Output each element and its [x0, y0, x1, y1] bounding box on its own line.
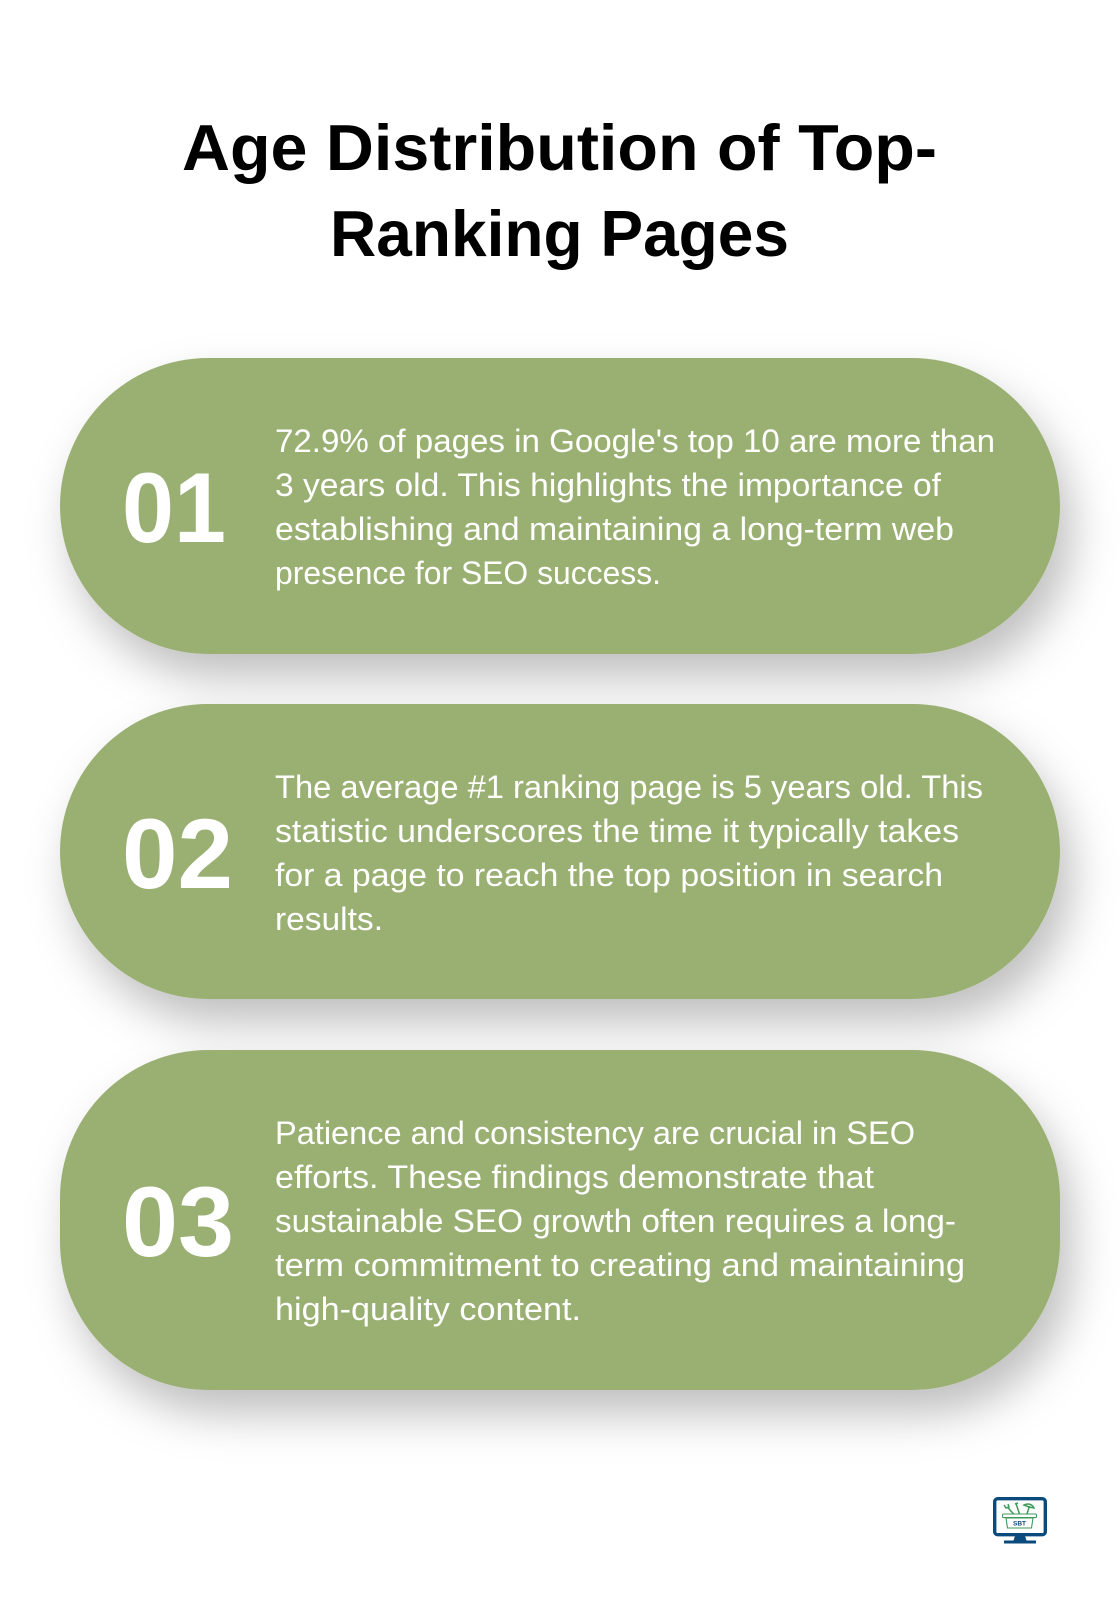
text block 03 — [275, 1115, 965, 1327]
text block 03: high-quality content. — [275, 1291, 581, 1327]
text block 03: sustainable SEO growth often requires a long- — [275, 1203, 956, 1239]
title: Age Distribution of Top- — [182, 111, 937, 184]
text block 02: statistic underscores the time it typically takes — [275, 813, 959, 849]
number 01: 01 — [122, 452, 226, 563]
text block 01: establishing and maintaining a long-term web — [275, 511, 954, 547]
text block 01: 72.9% of pages in Google's top 10 are more than — [275, 423, 995, 459]
text block 02: for a page to reach the top position in search — [275, 857, 943, 893]
panel: card 02 — [60, 704, 1060, 999]
text block 03: efforts. These findings demonstrate that — [275, 1159, 874, 1195]
icon: SBT monitor logo — [995, 1499, 1045, 1544]
title: Ranking Pages — [330, 197, 789, 270]
text block 02 — [275, 769, 983, 937]
panel: card 01 — [60, 358, 1060, 654]
number 02: 02 — [122, 798, 233, 909]
text block 01: presence for SEO success. — [275, 555, 661, 591]
text block 02: results. — [275, 901, 383, 937]
panel: card 03 — [60, 1050, 1060, 1390]
text block 02: The average #1 ranking page is 5 years old. This — [275, 769, 983, 805]
text block 01: 3 years old. This highlights the importance of — [275, 467, 941, 503]
title — [182, 111, 937, 270]
text block 03: term commitment to creating and maintaining — [275, 1247, 965, 1283]
icon: SBT monitor logo: SBT — [1013, 1520, 1026, 1528]
text block 01 — [275, 423, 995, 591]
text block 03: Patience and consistency are crucial in SEO — [275, 1115, 915, 1151]
number 03: 03 — [122, 1166, 234, 1277]
